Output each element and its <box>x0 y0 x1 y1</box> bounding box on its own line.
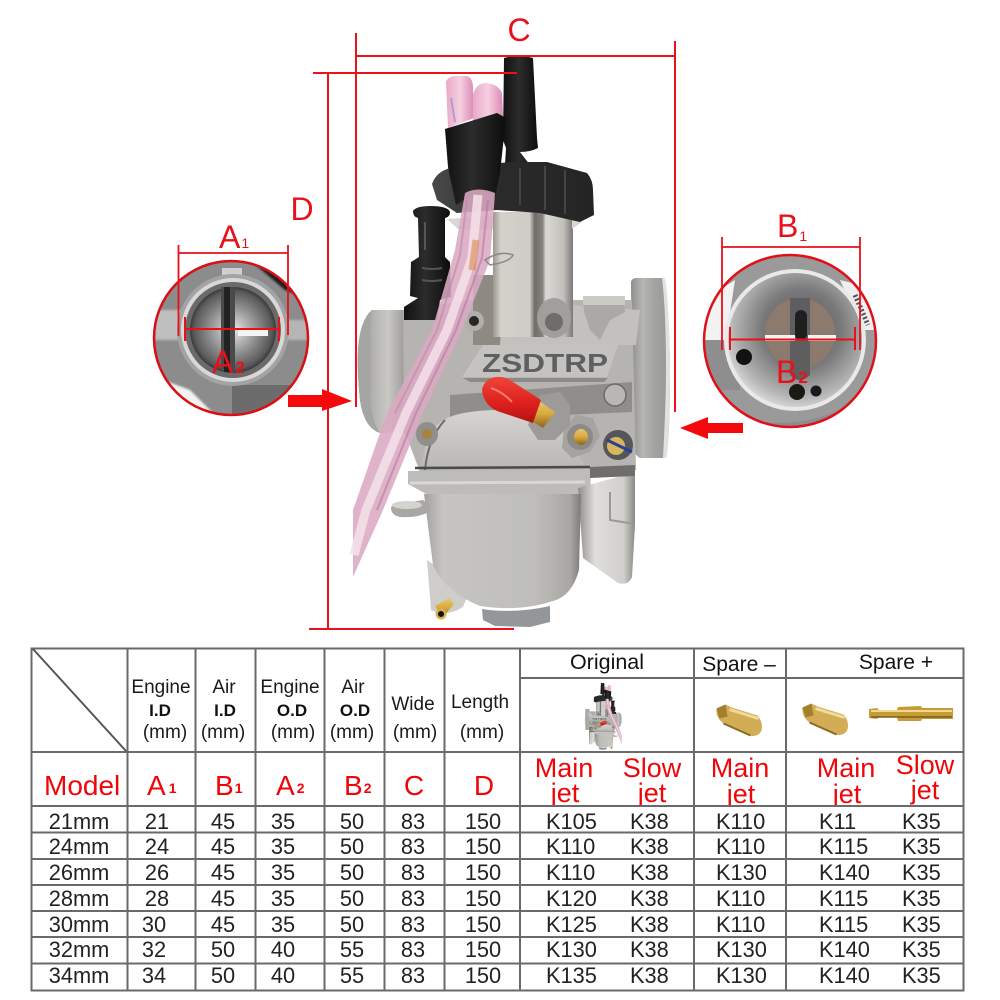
row 32mm: 50 <box>211 937 235 962</box>
carburetor photo illustration <box>353 56 670 627</box>
bore photo <box>155 262 307 414</box>
row 21mm: K38 <box>630 809 669 834</box>
row 34mm: 83 <box>401 963 425 988</box>
engine outer diameter header <box>260 677 320 743</box>
row 24mm: 45 <box>211 834 235 859</box>
air outer diameter header: (mm) <box>330 722 374 743</box>
row 30mm: K38 <box>630 912 669 937</box>
original header: Original <box>570 650 644 674</box>
specification table <box>31 648 964 990</box>
B2 code: 2 <box>364 780 372 796</box>
row 30mm: K115 <box>819 912 868 937</box>
row 26mm: K38 <box>630 860 669 885</box>
row 21mm: K110 <box>716 809 765 834</box>
air outer diameter header <box>330 677 374 743</box>
engine inner diameter header <box>131 677 191 743</box>
thumbnail: carburetor <box>585 683 622 750</box>
A1 dimension <box>178 245 288 336</box>
red code row <box>44 750 955 809</box>
original slow jet label: Slow <box>623 753 682 783</box>
row 34mm: 34 <box>142 963 166 988</box>
row 30mm: 30 <box>142 912 166 937</box>
row 26mm: 26 <box>145 860 169 885</box>
engine inner diameter header: I.D <box>149 701 171 720</box>
row 24mm: K38 <box>630 834 669 859</box>
A1 code: 1 <box>169 780 177 796</box>
row 34mm <box>49 963 941 988</box>
row 28mm: 50 <box>340 886 364 911</box>
row 28mm: K110 <box>716 886 765 911</box>
dimension D label: D <box>290 191 314 227</box>
original main jet label <box>535 753 593 808</box>
length header <box>451 692 509 743</box>
A2 dimension <box>185 317 279 341</box>
row 26mm: 150 <box>465 860 501 885</box>
spare plus slow jet label: jet <box>910 775 940 805</box>
row 30mm: 45 <box>211 912 235 937</box>
row 21mm: 21 <box>145 809 169 834</box>
row 30mm <box>49 912 941 937</box>
original slow jet label <box>623 753 682 808</box>
row 26mm <box>49 860 941 885</box>
row 24mm: K115 <box>819 834 868 859</box>
row 24mm: 83 <box>401 834 425 859</box>
arrow: flow into left side <box>288 389 352 411</box>
row 30mm: K110 <box>716 912 765 937</box>
row 30mm: 30mm <box>49 912 109 937</box>
wide header <box>391 694 437 743</box>
B2 label: B2 <box>776 354 808 390</box>
B1 label: B <box>777 208 798 244</box>
row 21mm <box>49 809 941 834</box>
row 32mm: K38 <box>630 937 669 962</box>
row 32mm: 32 <box>142 937 166 962</box>
row 30mm: 50 <box>340 912 364 937</box>
row 24mm: K35 <box>902 834 941 859</box>
row 28mm: 83 <box>401 886 425 911</box>
row 34mm: 40 <box>271 963 295 988</box>
row 32mm: 55 <box>340 937 364 962</box>
B2 code: B <box>344 770 363 801</box>
row 24mm: 24mm <box>49 834 109 859</box>
A1 label: A1 <box>219 219 249 255</box>
row 34mm: 50 <box>211 963 235 988</box>
length header: (mm) <box>460 722 504 743</box>
A2 code: 2 <box>297 780 305 796</box>
row 32mm: K130 <box>546 937 597 962</box>
row 34mm: K135 <box>546 963 597 988</box>
row 21mm: 83 <box>401 809 425 834</box>
row 34mm: K140 <box>819 963 870 988</box>
row 24mm: 24 <box>145 834 169 859</box>
arrow: flow into right side <box>680 417 743 439</box>
row 28mm: K38 <box>630 886 669 911</box>
spare plus slow jet label: Slow <box>896 750 955 780</box>
B1 code: B <box>215 770 234 801</box>
right inset: air side bore <box>702 214 878 428</box>
row 24mm <box>49 834 941 859</box>
row 28mm: 35 <box>271 886 295 911</box>
engine outer diameter header: O.D <box>277 701 307 720</box>
column headers <box>131 650 933 743</box>
A2 code: A <box>276 770 295 801</box>
row 34mm: 34mm <box>49 963 109 988</box>
row 21mm: K105 <box>546 809 597 834</box>
row 28mm: K35 <box>902 886 941 911</box>
thumbnail: spare plus main jet <box>802 704 848 735</box>
row 21mm: K11 <box>819 809 856 834</box>
row 26mm: K35 <box>902 860 941 885</box>
bore photo <box>705 256 875 426</box>
engine outer diameter header: (mm) <box>271 722 315 743</box>
engine inner diameter header: (mm) <box>143 722 187 743</box>
row 28mm <box>49 886 941 911</box>
row 32mm: K140 <box>819 937 870 962</box>
row 32mm: 83 <box>401 937 425 962</box>
row 24mm: 50 <box>340 834 364 859</box>
row 24mm: 150 <box>465 834 501 859</box>
row 34mm: K35 <box>902 963 941 988</box>
row 34mm: 55 <box>340 963 364 988</box>
row 30mm: 83 <box>401 912 425 937</box>
row 26mm: 35 <box>271 860 295 885</box>
spare plus header: Spare + <box>859 651 933 674</box>
engine inner diameter header: Engine <box>131 677 191 698</box>
spare plus slow jet label <box>896 750 955 805</box>
row 26mm: 45 <box>211 860 235 885</box>
left inset: engine side bore <box>152 226 310 416</box>
row 21mm: 35 <box>271 809 295 834</box>
spare minus header: Spare – <box>702 653 776 676</box>
row 21mm: 21mm <box>49 809 109 834</box>
row 28mm: 28mm <box>49 886 109 911</box>
row 26mm: 83 <box>401 860 425 885</box>
table grid <box>31 648 964 990</box>
row 32mm <box>49 937 941 962</box>
A1 code: A <box>147 770 166 801</box>
air inner diameter header: (mm) <box>201 722 245 743</box>
dimension C bracket <box>356 33 675 412</box>
original slow jet label: jet <box>637 778 667 808</box>
row 26mm: K130 <box>716 860 767 885</box>
B1 code: 1 <box>235 780 243 796</box>
row 32mm: 40 <box>271 937 295 962</box>
row 26mm: K140 <box>819 860 870 885</box>
length header: Length <box>451 692 509 713</box>
row 32mm: 32mm <box>49 937 109 962</box>
air outer diameter header: Air <box>341 677 365 698</box>
air inner diameter header: Air <box>212 677 236 698</box>
spare plus main jet label <box>817 753 875 809</box>
row 24mm: K110 <box>546 834 595 859</box>
inset border <box>704 255 876 427</box>
row 28mm: K115 <box>819 886 868 911</box>
row 21mm: K35 <box>902 809 941 834</box>
row 24mm: 35 <box>271 834 295 859</box>
C code: C <box>404 770 424 801</box>
dimension C label: C <box>507 12 531 48</box>
D code: D <box>474 770 494 801</box>
row 28mm: 150 <box>465 886 501 911</box>
original main jet label: jet <box>550 778 580 808</box>
row 32mm: 150 <box>465 937 501 962</box>
wide header: (mm) <box>393 722 437 743</box>
row 26mm: K110 <box>546 860 595 885</box>
thumbnail: spare minus main jet <box>716 704 762 736</box>
table background <box>31 648 964 990</box>
inset border <box>154 261 308 415</box>
row 34mm: K38 <box>630 963 669 988</box>
row 21mm: 50 <box>340 809 364 834</box>
spare plus main jet label: Main <box>817 753 875 783</box>
original main jet label: Main <box>535 753 593 783</box>
row 26mm: 50 <box>340 860 364 885</box>
dimension D bracket <box>309 73 517 629</box>
row 32mm: K35 <box>902 937 941 962</box>
row 30mm: 150 <box>465 912 501 937</box>
data rows mask <box>31 806 964 990</box>
B2 dimension <box>730 327 855 350</box>
row 28mm: K120 <box>546 886 597 911</box>
row 28mm: 45 <box>211 886 235 911</box>
wide header: Wide <box>391 694 435 715</box>
row 32mm: K130 <box>716 937 767 962</box>
row 34mm: 150 <box>465 963 501 988</box>
air inner diameter header: I.D <box>214 701 236 720</box>
row 21mm: 150 <box>465 809 501 834</box>
air inner diameter header <box>201 677 245 743</box>
spare plus main jet label: jet <box>832 779 862 809</box>
B1 dimension <box>722 237 860 350</box>
thumbnail: slow jet needle <box>869 706 953 721</box>
row 30mm: K125 <box>546 912 597 937</box>
row 30mm: 35 <box>271 912 295 937</box>
B1 label: 1 <box>799 228 807 244</box>
engine outer diameter header: Engine <box>260 677 320 698</box>
spare minus main jet label: Main <box>711 753 769 783</box>
air outer diameter header: O.D <box>340 701 370 720</box>
row 28mm: 28 <box>145 886 169 911</box>
row 26mm: 26mm <box>49 860 109 885</box>
row 21mm: 45 <box>211 809 235 834</box>
model label: Model <box>44 770 120 801</box>
row 30mm: K35 <box>902 912 941 937</box>
row 34mm: K130 <box>716 963 767 988</box>
spare minus main jet label: jet <box>726 779 756 809</box>
A2 label: A2 <box>212 344 245 380</box>
row 24mm: K110 <box>716 834 765 859</box>
spare minus main jet label <box>711 753 769 809</box>
